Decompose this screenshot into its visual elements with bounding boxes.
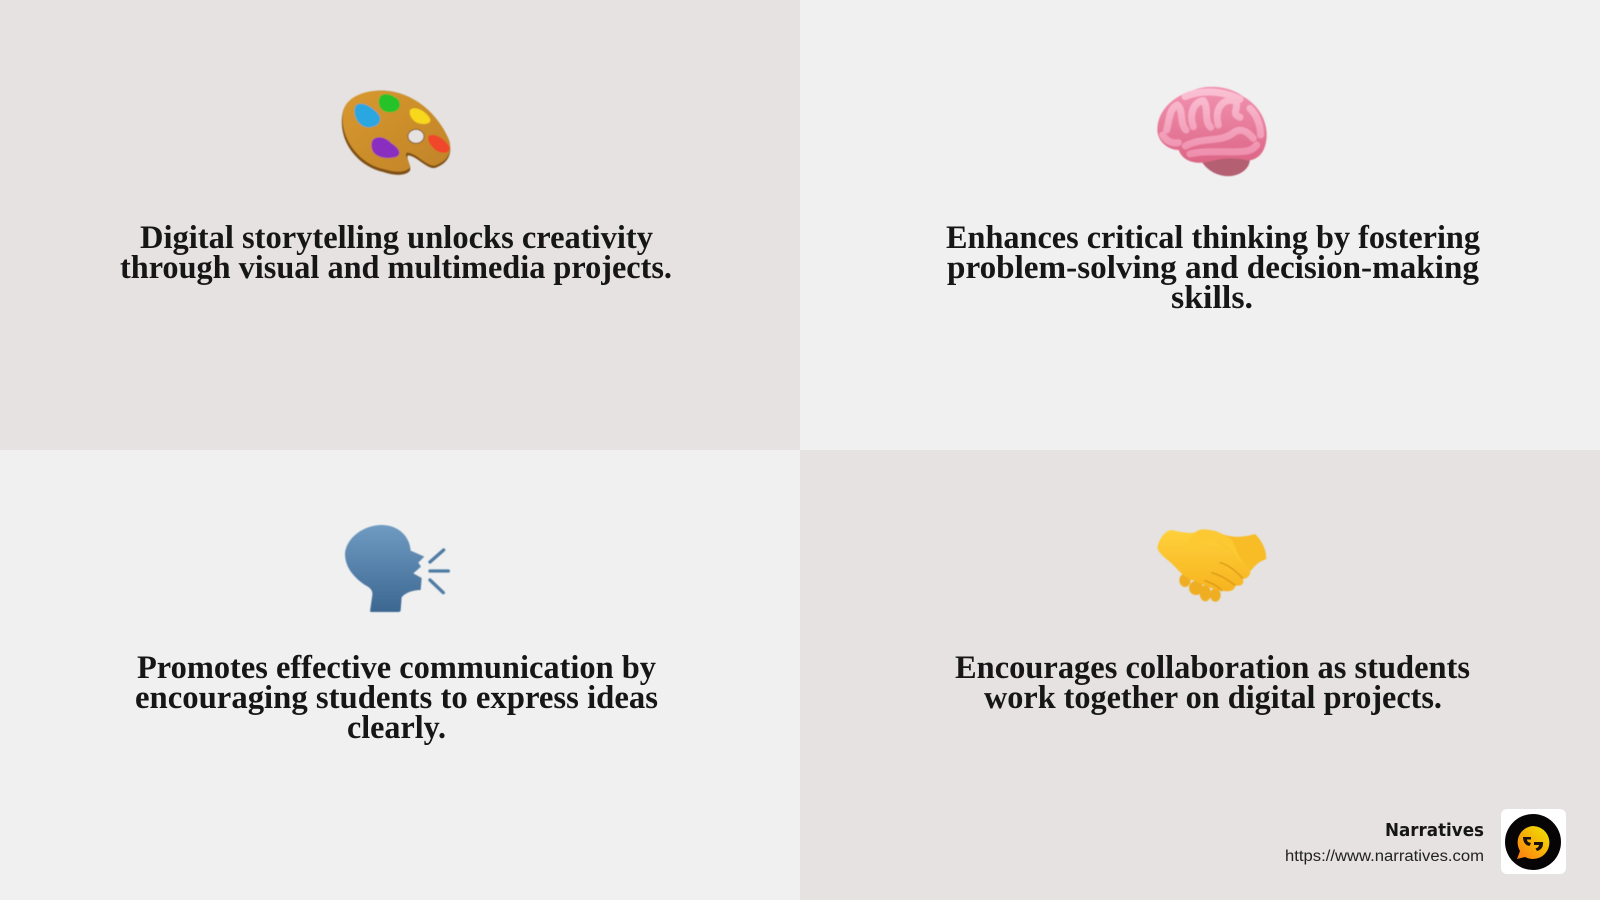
icon: artist palette [342,91,450,175]
heading: critical thinking: skills. [1171,280,1253,316]
brand url: https://www.narratives.com [1285,848,1484,865]
heading: creativity: Digital storytelling unlocks creativity [140,220,653,256]
icon: handshake [1157,529,1266,602]
heading: communication: clearly. [347,710,446,746]
panel: communication [0,450,800,900]
panel: collaboration [800,450,1600,900]
brand name: Narratives [1385,820,1484,841]
logo [1501,809,1566,874]
heading: critical thinking: Enhances critical thinking by fostering [946,220,1480,256]
icon: speaking head [345,525,448,612]
heading: critical thinking: problem-solving and decision-making [947,250,1479,286]
heading: creativity: through visual and multimedia projects. [120,250,672,286]
heading: collaboration: work together on digital projects. [984,680,1442,716]
heading: collaboration: Encourages collaboration as students [955,650,1470,686]
icon: brain [1157,87,1267,176]
panel: creativity [0,0,800,450]
panel: critical thinking [800,0,1600,450]
heading: communication: encouraging students to express ideas [135,680,658,716]
heading: communication: Promotes effective communication by [137,650,656,686]
